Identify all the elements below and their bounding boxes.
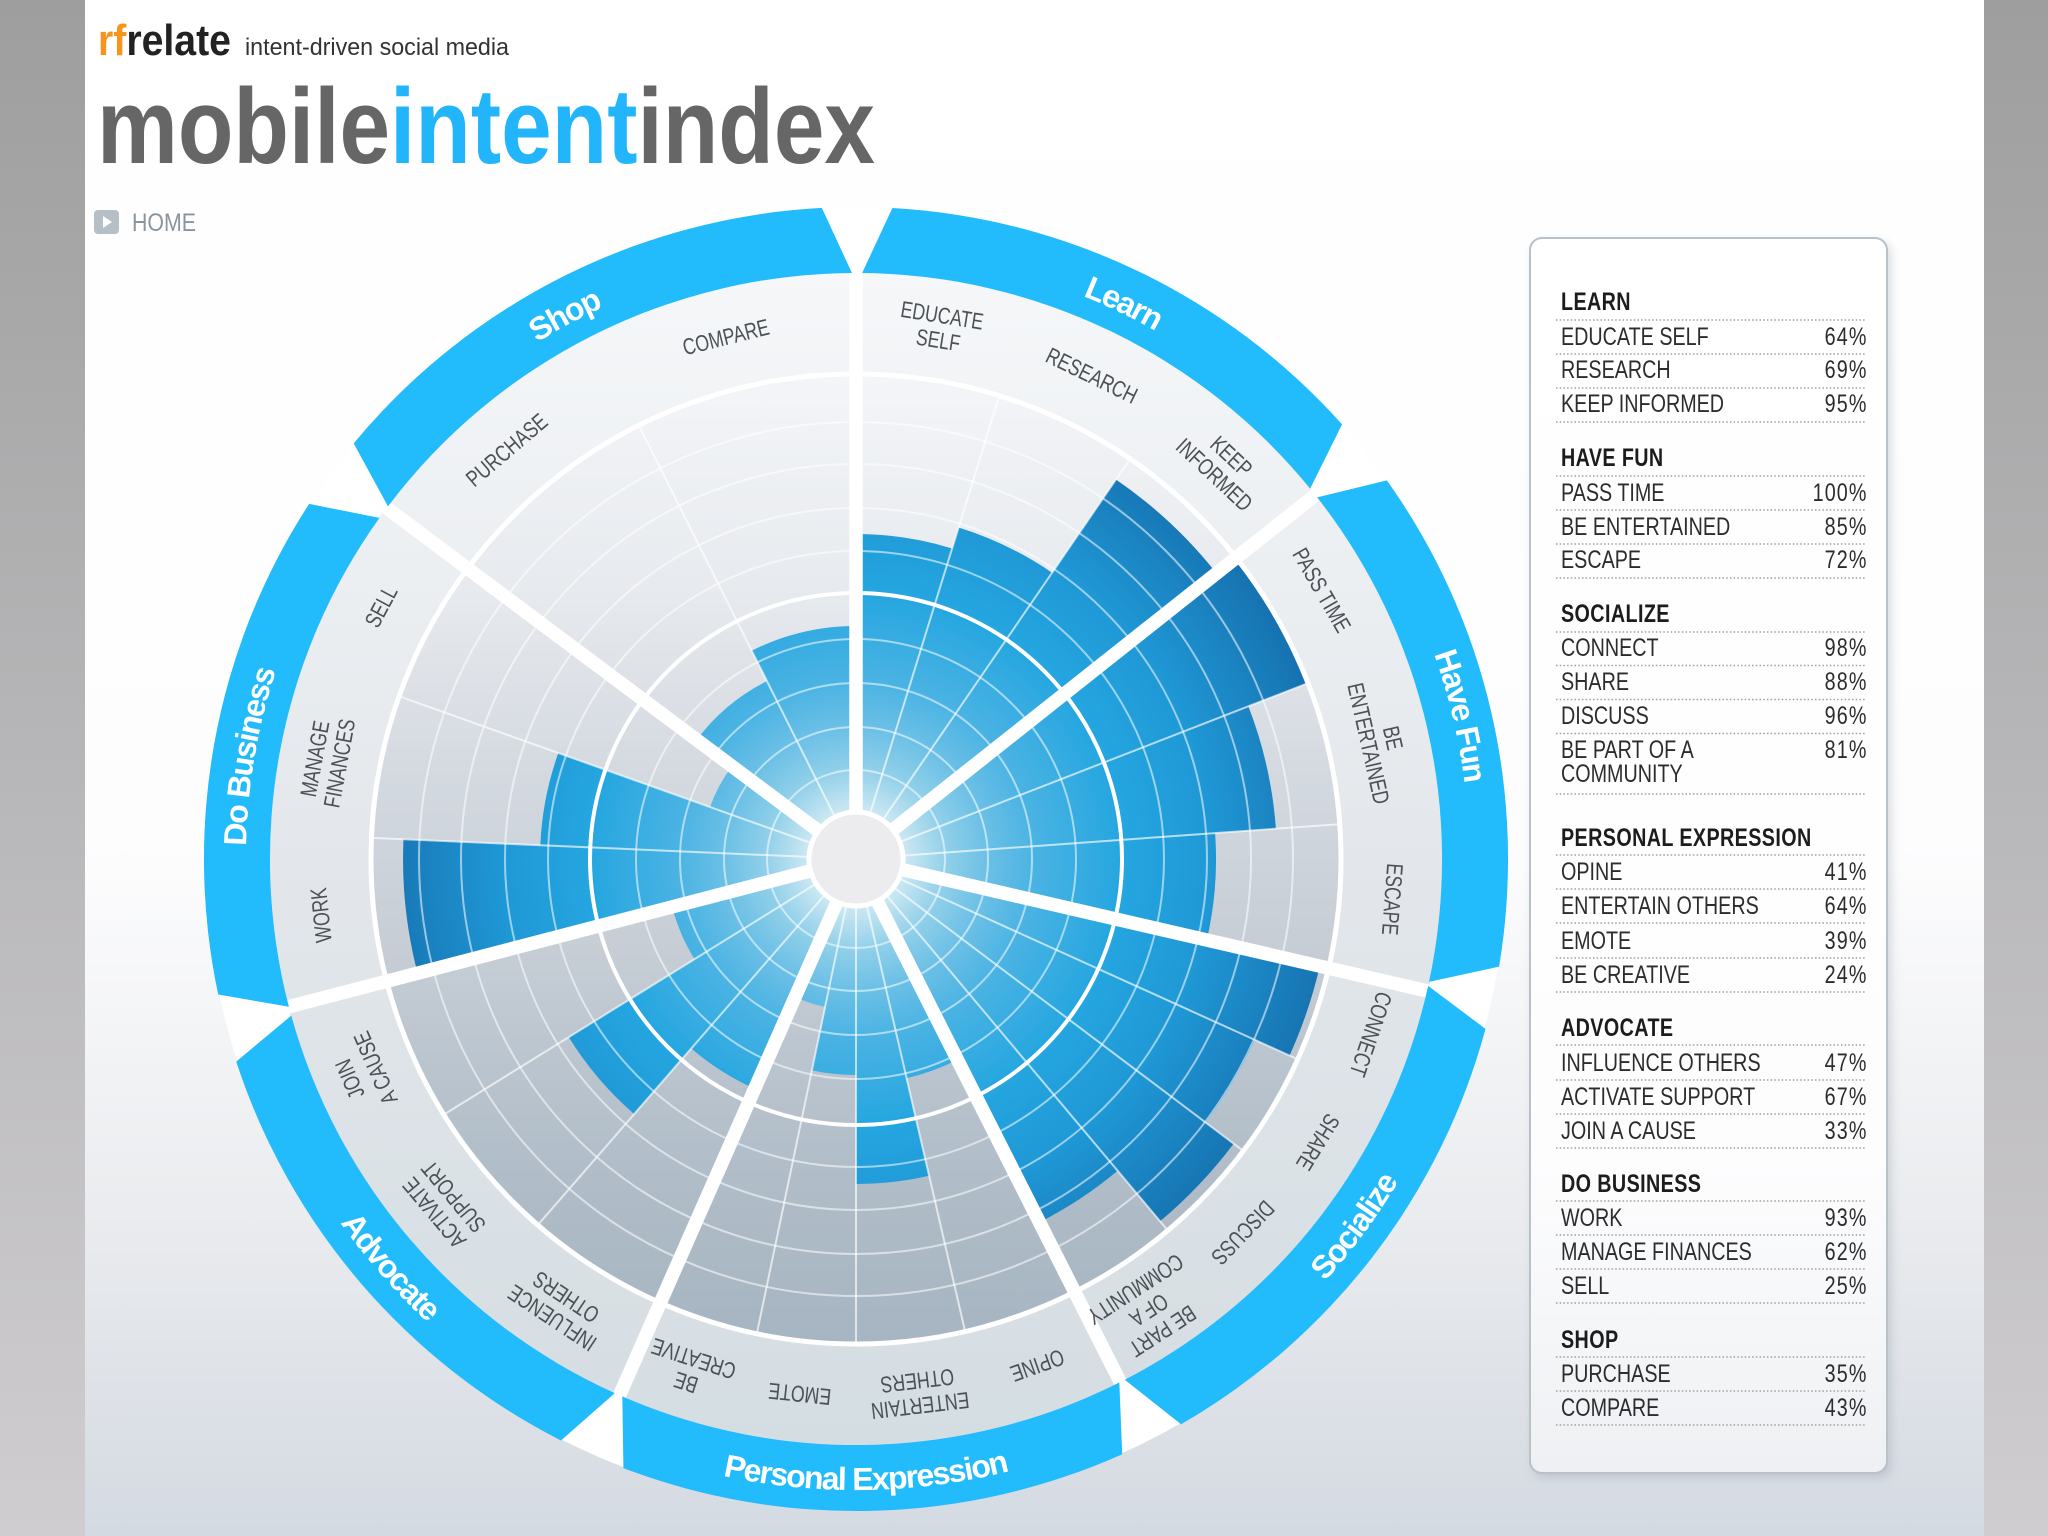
icon: home play button	[94, 210, 119, 234]
legend group: shop: SHOP	[1561, 1326, 1619, 1354]
wedge: be part of a community 81%	[856, 859, 1118, 1222]
wedge: opine 41%	[856, 859, 958, 1078]
label: entertain others: OTHERS	[879, 1363, 955, 1397]
legend group: personal expression: BE CREATIVE	[1561, 961, 1690, 989]
legend group: advocate: ADVOCATE	[1561, 1014, 1673, 1042]
legend group: socialize: SHARE	[1561, 668, 1629, 696]
wedge: activate support 67%	[569, 859, 856, 1114]
label: educate self: EDUCATE	[899, 297, 985, 335]
label: educate self: SELF	[914, 324, 962, 357]
label: influence others: OTHERS	[528, 1266, 604, 1328]
legend group: have fun: HAVE FUN	[1561, 444, 1664, 472]
legend group: learn: LEARN	[1561, 288, 1631, 316]
legend group: do business: MANAGE FINANCES	[1561, 1238, 1752, 1266]
label: be part of a community: COMMUNITY	[1082, 1248, 1188, 1329]
band: shop	[329, 159, 854, 507]
legend group: have fun: PASS TIME	[1561, 479, 1664, 507]
legend group: personal expression: PERSONAL EXPRESSION	[1561, 824, 1812, 852]
label: be part of a community: OF A	[1124, 1288, 1173, 1332]
band title: personal expression: Personal Expression	[724, 1454, 1008, 1496]
legend group: socialize: 88%	[1825, 668, 1868, 696]
label: activate support: ACTIVATE	[398, 1172, 472, 1253]
legend group: socialize: SOCIALIZE	[1561, 600, 1670, 628]
home link	[94, 209, 196, 237]
wedge: escape 72%	[856, 833, 1216, 940]
legend group: have fun: ESCAPE	[1561, 546, 1641, 574]
wedge labels	[295, 297, 1418, 1424]
legend group: have fun	[1561, 444, 1868, 574]
legend group: have fun: BE ENTERTAINED	[1561, 513, 1730, 541]
legend group: shop: PURCHASE	[1561, 1360, 1671, 1388]
label: join a cause: JOIN	[331, 1055, 370, 1102]
wedge: influence others 47%	[691, 859, 856, 1089]
legend group: learn: EDUCATE SELF	[1561, 323, 1709, 351]
legend group: shop: 43%	[1825, 1394, 1868, 1422]
band title: have fun: Have Fun	[1434, 649, 1481, 782]
legend group: learn: 69%	[1825, 356, 1868, 384]
label: sell: SELL	[360, 582, 403, 632]
wedge: be entertained 85%	[856, 706, 1276, 859]
band: do business	[169, 495, 380, 1008]
wedge: connect 98%	[856, 859, 1320, 1056]
label: connect: CONNECT	[1344, 989, 1397, 1080]
legend group: shop: COMPARE	[1561, 1394, 1659, 1422]
legend group: do business: SELL	[1561, 1272, 1609, 1300]
label: keep informed: KEEP	[1205, 431, 1257, 482]
legend group: do business: 25%	[1825, 1272, 1868, 1300]
label: entertain others: ENTERTAIN	[870, 1386, 971, 1424]
label ring background	[269, 272, 1443, 1446]
logo: rfrelate: rfrelate	[98, 16, 231, 65]
band: learn	[861, 163, 1364, 489]
wedge: keep informed 95%	[856, 480, 1216, 859]
band title: do business: Do Business	[224, 668, 274, 844]
title: mobileintentindex	[97, 66, 875, 186]
legend group: advocate: INFLUENCE OTHERS	[1561, 1049, 1761, 1077]
label: be part of a community: BE PART	[1124, 1300, 1200, 1362]
legend group: advocate: ACTIVATE SUPPORT	[1561, 1083, 1755, 1111]
label: keep informed: INFORMED	[1171, 434, 1257, 517]
wedge: be creative 24%	[795, 859, 856, 1007]
legend group: personal expression: EMOTE	[1561, 927, 1631, 955]
label: work: WORK	[306, 886, 337, 944]
band: socialize	[1124, 985, 1525, 1455]
legend group: socialize: 98%	[1825, 634, 1868, 662]
legend group: personal expression: ENTERTAIN OTHERS	[1561, 892, 1759, 920]
grid disc background	[372, 375, 1340, 1343]
legend group: learn: 64%	[1825, 323, 1868, 351]
legend group: personal expression: 41%	[1825, 858, 1868, 886]
wedge: join a cause 33%	[672, 859, 856, 959]
legend group: shop	[1561, 1326, 1868, 1422]
label: research: RESEARCH	[1042, 343, 1141, 409]
band: have fun	[1317, 469, 1547, 983]
legend group: socialize: 81%	[1825, 736, 1868, 764]
band title: socialize: Socialize	[1312, 1176, 1396, 1278]
label: purchase: PURCHASE	[461, 409, 553, 492]
legend text	[1561, 288, 1868, 1422]
legend group: have fun: 100%	[1813, 479, 1868, 507]
label: manage finances: FINANCES	[319, 717, 361, 810]
wedge: work 93%	[403, 839, 856, 973]
radial chart	[204, 208, 1508, 1511]
wedge: manage finances 62%	[540, 753, 856, 859]
label: escape: ESCAPE	[1376, 863, 1407, 936]
label: share: SHARE	[1291, 1109, 1344, 1175]
wedge: emote 39%	[812, 859, 856, 1075]
label: compare: COMPARE	[680, 315, 772, 361]
label: discuss: DISCUSS	[1206, 1195, 1279, 1269]
legend group: socialize: DISCUSS	[1561, 702, 1649, 730]
data wedges	[403, 480, 1320, 1222]
legend group: do business: 62%	[1825, 1238, 1868, 1266]
wedge: compare 43%	[752, 626, 856, 859]
legend group: socialize: COMMUNITY	[1561, 760, 1683, 788]
band titles	[224, 276, 1481, 1496]
wedge: sell 25%	[710, 766, 856, 859]
wedge: discuss 96%	[856, 859, 1234, 1221]
legend group: personal expression: 64%	[1825, 892, 1868, 920]
legend group: do business: WORK	[1561, 1204, 1622, 1232]
label: be entertained: ENTERTAINED	[1342, 681, 1394, 807]
label: be entertained: BE	[1377, 724, 1407, 752]
legend group: shop: 35%	[1825, 1360, 1868, 1388]
legend group: socialize	[1561, 600, 1868, 788]
wedge: share 88%	[856, 859, 1255, 1123]
legend group: learn: 95%	[1825, 390, 1868, 418]
wedge: pass time 100%	[856, 558, 1307, 859]
tagline: intent-driven social media	[245, 34, 510, 61]
legend group: socialize: BE PART OF A	[1561, 736, 1694, 764]
panel: legend	[1530, 238, 1891, 1478]
band title: advocate: Advocate	[340, 1217, 436, 1320]
legend group: do business: 93%	[1825, 1204, 1868, 1232]
label: manage finances: MANAGE	[296, 719, 335, 799]
label: emote: EMOTE	[767, 1377, 832, 1409]
legend group: personal expression	[1561, 824, 1868, 989]
label: pass time: PASS TIME	[1287, 544, 1356, 637]
legend group: do business	[1561, 1170, 1868, 1300]
home label: HOME	[132, 209, 196, 237]
band title: learn: Learn	[1084, 276, 1160, 330]
legend group: socialize: 96%	[1825, 702, 1868, 730]
legend group: learn	[1561, 288, 1868, 418]
wedge: research 69%	[856, 528, 1052, 859]
label: be creative: CREATIVE	[648, 1332, 739, 1384]
wedge: educate self 64%	[856, 534, 952, 859]
label: influence others: INFLUENCE	[504, 1279, 601, 1356]
legend group: do business: DO BUSINESS	[1561, 1170, 1701, 1198]
label: activate support: SUPPORT	[416, 1155, 491, 1237]
blue category bands	[169, 159, 1547, 1518]
center hub	[809, 812, 903, 906]
legend group: socialize: CONNECT	[1561, 634, 1659, 662]
wedge: entertain others 64%	[856, 859, 929, 1184]
legend group: learn: KEEP INFORMED	[1561, 390, 1724, 418]
legend group: have fun: 85%	[1825, 513, 1868, 541]
legend group: advocate: JOIN A CAUSE	[1561, 1117, 1696, 1145]
band title: shop: Shop	[530, 294, 600, 340]
legend group: advocate: 67%	[1825, 1083, 1868, 1111]
legend group: advocate: 47%	[1825, 1049, 1868, 1077]
label: join a cause: A CAUSE	[349, 1027, 403, 1108]
band: advocate	[199, 1015, 615, 1473]
legend group: advocate: 33%	[1825, 1117, 1868, 1145]
legend group: personal expression: OPINE	[1561, 858, 1622, 886]
legend group: personal expression: 39%	[1825, 927, 1868, 955]
wedge: purchase 35%	[697, 681, 856, 859]
label: be creative: BE	[671, 1366, 701, 1398]
band: personal expression	[621, 1383, 1124, 1518]
legend group: learn: RESEARCH	[1561, 356, 1671, 384]
legend group: advocate	[1561, 1014, 1868, 1145]
legend group: have fun: 72%	[1825, 546, 1868, 574]
label: opine: OPINE	[1007, 1343, 1067, 1386]
legend group: personal expression: 24%	[1825, 961, 1868, 989]
